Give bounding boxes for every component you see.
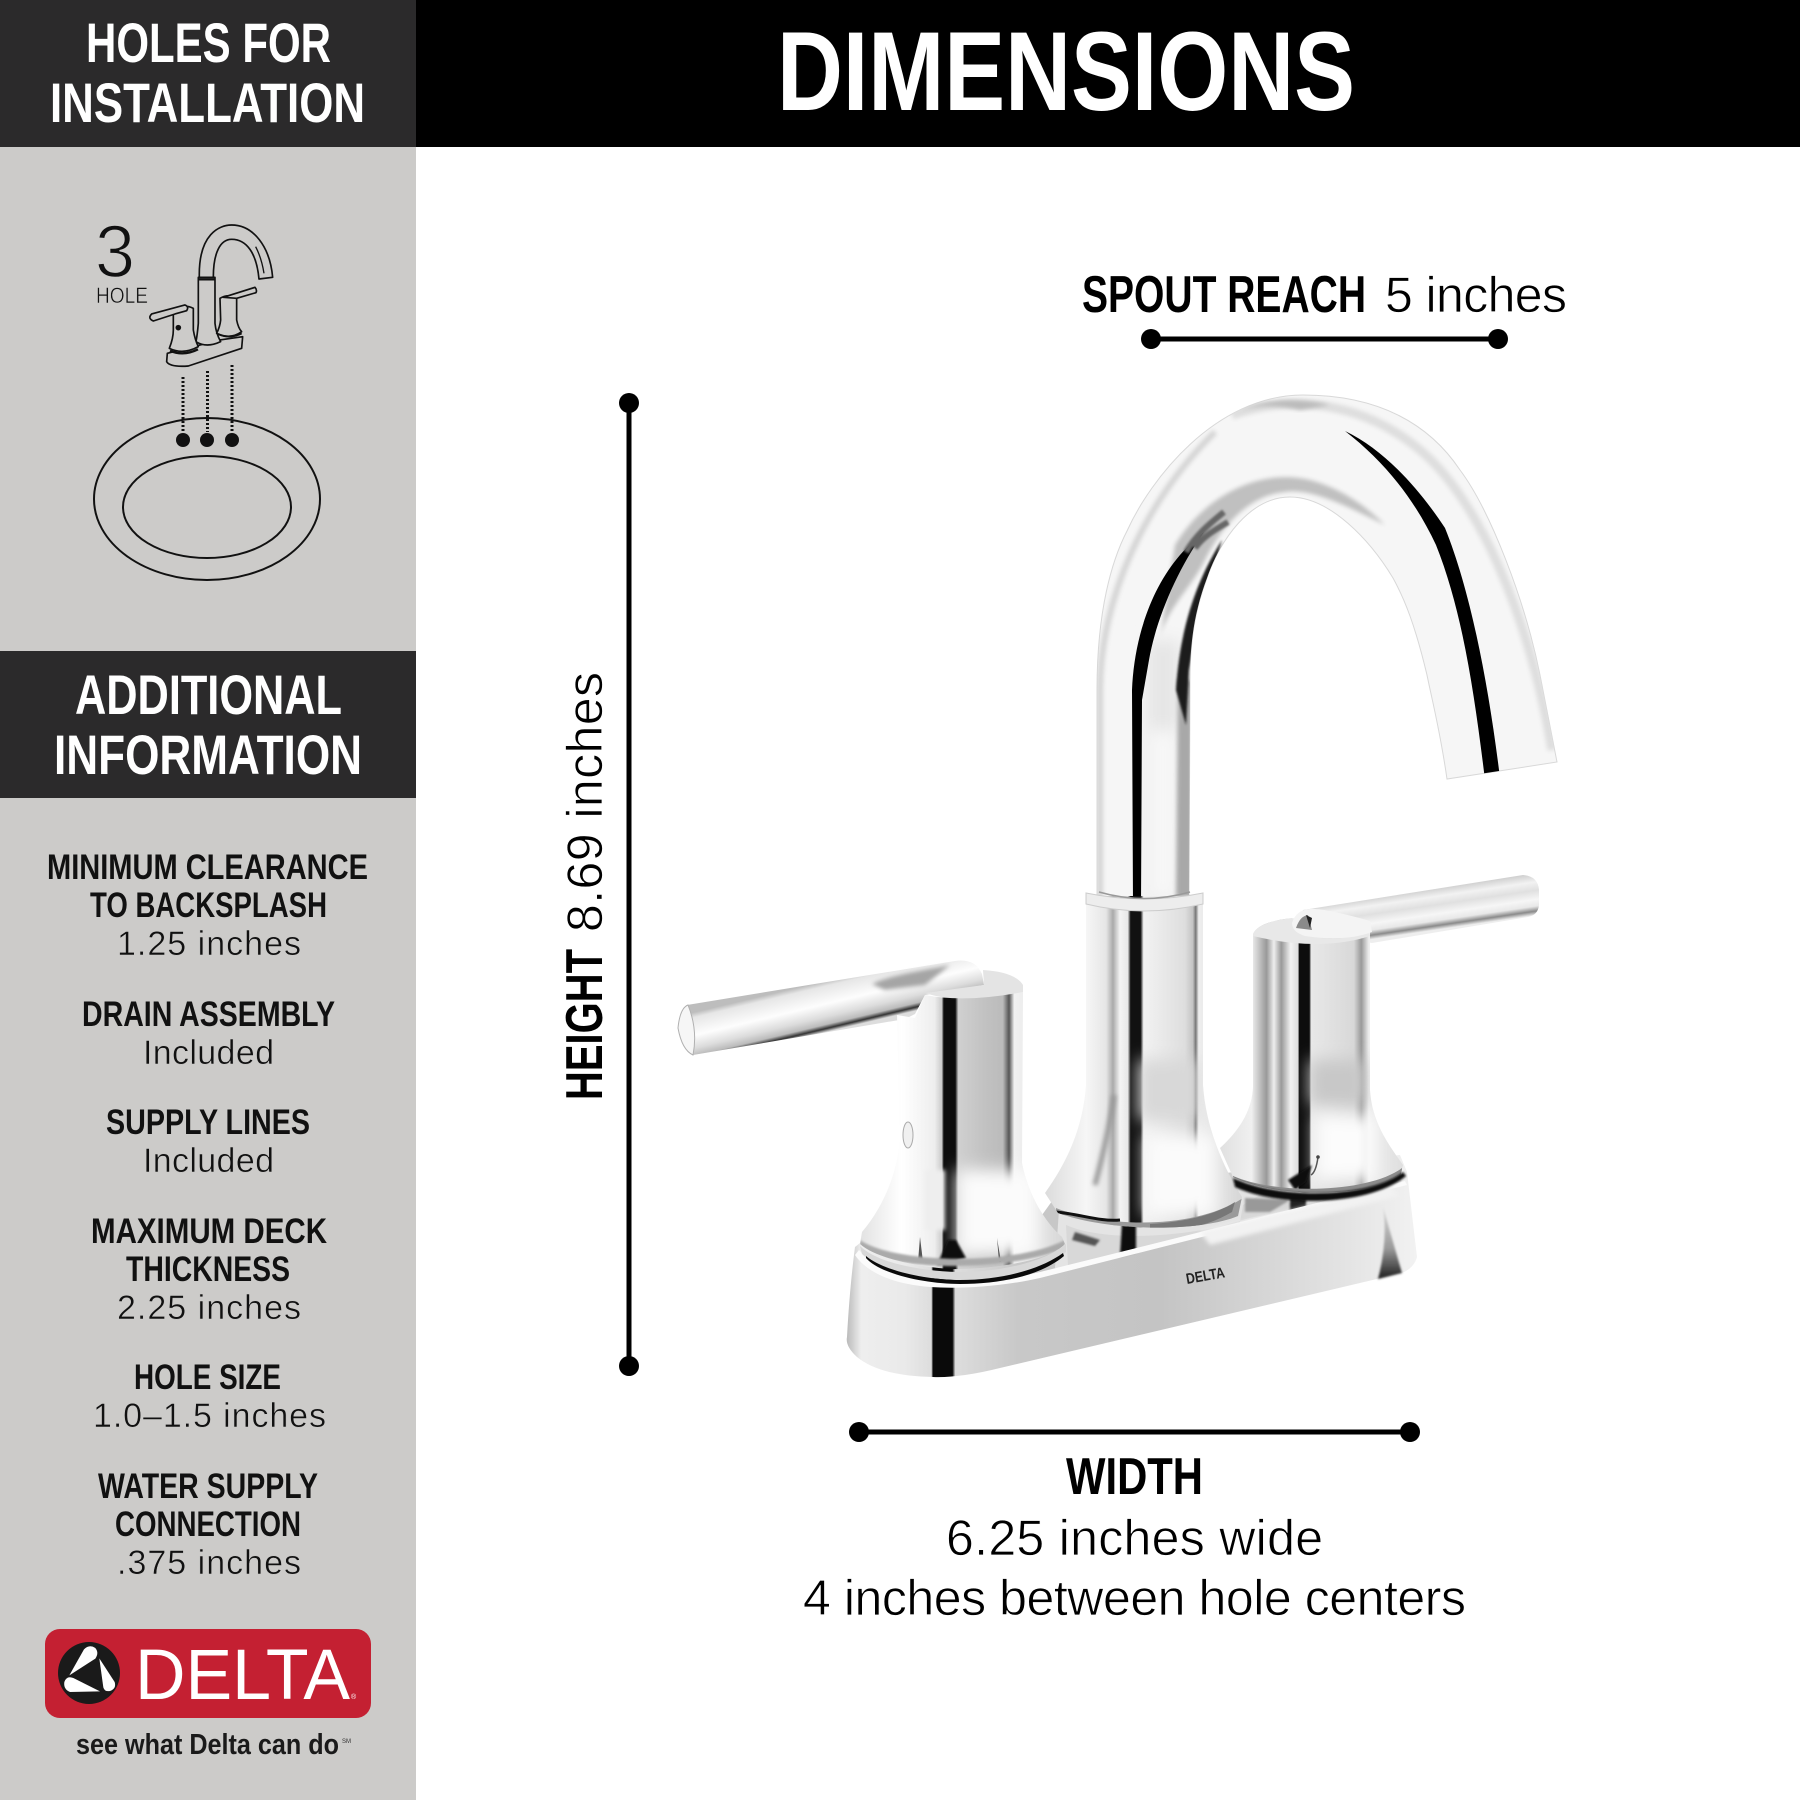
text block: water supply connection: .375 inches: [117, 1544, 301, 1582]
product: faucet: [678, 395, 1557, 1377]
arrow: height dimension: [619, 393, 639, 1376]
label: width: 4 inches between hole centers: [803, 1570, 1466, 1626]
logo: Delta: DELTA: [135, 1636, 351, 1715]
text block: supply lines: [106, 1103, 310, 1180]
text block: water supply connection: WATER SUPPLY: [98, 1467, 318, 1506]
heading: holes for installation: HOLES FOR: [86, 11, 331, 74]
text block: maximum deck thickness: MAXIMUM DECK: [91, 1212, 327, 1251]
text block: drain assembly: [82, 995, 335, 1072]
text block: water supply connection: [98, 1467, 318, 1582]
heading: additional information: INFORMATION: [54, 723, 362, 786]
label: height: [556, 672, 614, 1100]
text block: hole size: HOLE SIZE: [134, 1358, 281, 1397]
label: width: [803, 1448, 1466, 1626]
label: width: 6.25 inches wide: [946, 1510, 1323, 1566]
arrow: width dimension: [849, 1422, 1420, 1442]
text block: maximum deck thickness: 2.25 inches: [117, 1289, 301, 1327]
faucet center column: [1045, 892, 1243, 1232]
label: height: HEIGHT: [556, 949, 614, 1100]
text block: drain assembly: Included: [143, 1034, 274, 1072]
text block: minimum clearance: MINIMUM CLEARANCE: [47, 848, 368, 887]
title bar: DIMENSIONS: [777, 9, 1355, 134]
label: width: WIDTH: [1066, 1448, 1203, 1506]
icon: three hole label: 3: [95, 210, 135, 293]
logo: Delta: see what Delta can do: [76, 1729, 339, 1761]
panel: sidebar: [0, 0, 416, 1800]
text block: minimum clearance: TO BACKSPLASH: [90, 886, 327, 925]
text block: maximum deck thickness: [91, 1212, 327, 1327]
faucet right handle: [1220, 875, 1539, 1201]
icon: three hole label: [95, 210, 148, 308]
logo: Delta: [45, 1629, 371, 1761]
icon: faucet line drawing: [150, 225, 273, 366]
faucet spout: [1097, 395, 1557, 905]
text block: minimum clearance: [47, 848, 368, 963]
text block: hole size: 1.0–1.5 inches: [93, 1397, 326, 1435]
text block: supply lines: Included: [143, 1142, 274, 1180]
heading: holes for installation: INSTALLATION: [50, 71, 365, 134]
heading: holes for installation: [0, 0, 416, 147]
text block: minimum clearance: 1.25 inches: [117, 925, 301, 963]
heading: additional information: [0, 651, 416, 798]
logo: Delta: ®: [351, 1693, 357, 1701]
text block: maximum deck thickness: THICKNESS: [126, 1250, 290, 1289]
logo: Delta: SM: [342, 1739, 351, 1745]
label: spout reach: SPOUT REACH: [1082, 266, 1366, 324]
text block: drain assembly: DRAIN ASSEMBLY: [82, 995, 335, 1034]
faucet deck plate: [847, 1155, 1417, 1377]
heading: additional information: ADDITIONAL: [75, 663, 342, 726]
title bar: [416, 0, 1800, 147]
label: height: 8.69 inches: [557, 672, 613, 932]
text block: hole size: [93, 1358, 326, 1435]
faucet deck plate: DELTA: [1185, 1264, 1226, 1288]
arrow: spout reach dimension: [1141, 329, 1508, 349]
icon: sink with three holes: [94, 365, 320, 580]
faucet left handle: [678, 961, 1066, 1284]
text block: supply lines: SUPPLY LINES: [106, 1103, 310, 1142]
label: spout reach: 5 inches: [1385, 267, 1567, 323]
icon: three hole label: HOLE: [96, 283, 148, 308]
text block: water supply connection: CONNECTION: [115, 1505, 301, 1544]
